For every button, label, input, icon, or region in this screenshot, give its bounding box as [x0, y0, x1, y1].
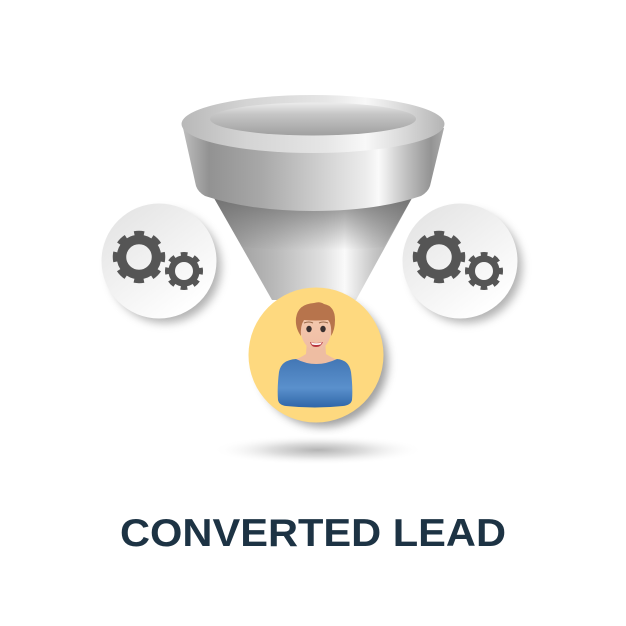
small gear — [168, 254, 200, 288]
large gear — [416, 234, 462, 280]
large gear — [116, 234, 162, 280]
funnel opening — [210, 102, 416, 136]
eyes — [306, 326, 326, 332]
hair — [296, 302, 335, 336]
left gear disc — [102, 204, 221, 323]
funnel cone — [214, 198, 412, 300]
funnel rim — [182, 95, 444, 153]
face — [300, 316, 332, 350]
person — [278, 302, 352, 408]
neck — [294, 340, 338, 366]
funnel — [182, 95, 444, 300]
mouth — [310, 342, 323, 347]
floor shadow — [212, 435, 424, 465]
title: CONVERTED LEAD — [120, 512, 506, 555]
eyebrows — [304, 322, 328, 323]
shirt — [278, 359, 352, 408]
small gear — [468, 254, 500, 288]
person badge — [248, 288, 388, 427]
funnel upper body — [183, 128, 444, 211]
right gear disc — [402, 204, 522, 323]
